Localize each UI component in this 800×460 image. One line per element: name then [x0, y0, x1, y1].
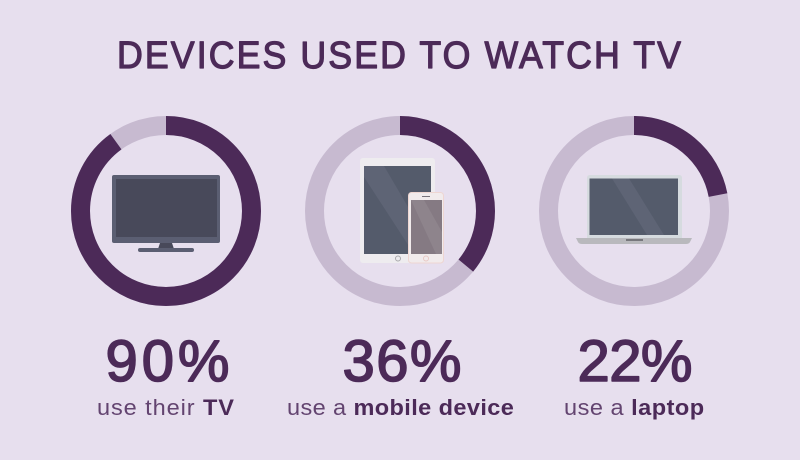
donut chart: 36% [314, 126, 486, 296]
icon: phone [408, 192, 444, 263]
stat: 90%: 90% [106, 329, 230, 394]
icon: television [112, 175, 220, 252]
icon: laptop [576, 175, 692, 244]
label: use a mobile device: use a mobile device [287, 395, 514, 420]
stat: 22%: 22% [578, 329, 692, 394]
donut chart: 90% [80, 126, 252, 296]
panel: mobile device [287, 126, 514, 420]
icon: tablet [360, 158, 435, 263]
donut chart: 22% [548, 126, 720, 296]
stat: 36%: 36% [342, 329, 462, 394]
title: DEVICES USED TO WATCH TV [117, 34, 681, 76]
label: use a laptop: use a laptop [564, 395, 704, 420]
panel: laptop [548, 126, 720, 420]
label: use their TV: use their TV [97, 395, 235, 420]
panel: TV [80, 126, 252, 420]
